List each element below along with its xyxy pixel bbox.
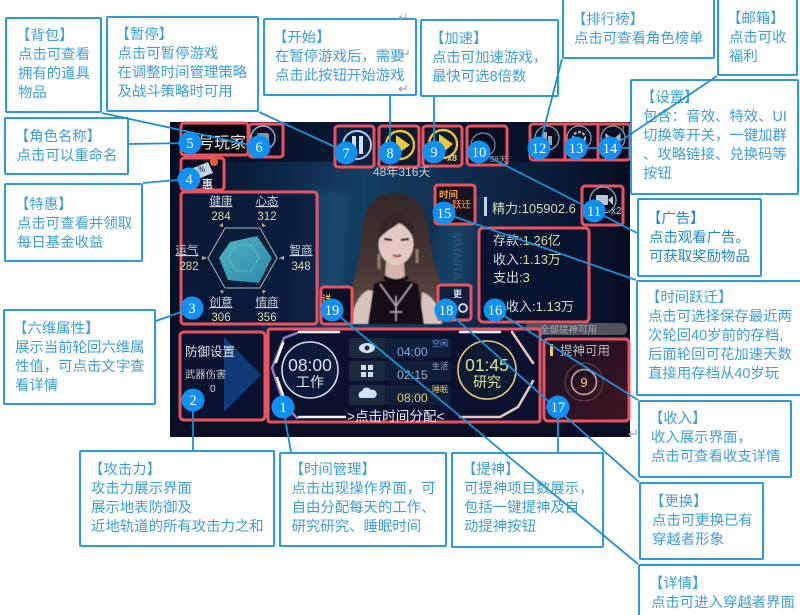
time management panel 1 bbox=[268, 329, 540, 424]
callout: 更换: 穿越者形象 bbox=[652, 532, 724, 548]
callout: 攻击力: 攻击力展示界面 bbox=[91, 480, 192, 496]
callout: 时间管理: 【时间管理】 bbox=[290, 462, 376, 478]
callout: 暂停: 【暂停】 bbox=[116, 26, 173, 42]
empty button 10 bbox=[467, 126, 507, 165]
detail button 19: 详 bbox=[322, 293, 331, 304]
time allocation rows: 生活 bbox=[432, 361, 448, 371]
number badges: 3 bbox=[188, 301, 196, 317]
character portrait: MMAIRA bbox=[450, 232, 464, 280]
number badges: 10 bbox=[472, 145, 486, 161]
speed up button 9 bbox=[423, 126, 462, 166]
callout: 提神: 包括一键提神及自 bbox=[464, 500, 579, 516]
attack power panel 2: 武器伤害 bbox=[185, 368, 226, 381]
number badges: 12 bbox=[532, 141, 546, 157]
screen background bbox=[170, 122, 630, 437]
number badges: 1 bbox=[279, 400, 287, 416]
character portrait bbox=[348, 193, 464, 324]
callout: 收入: 【收入】 bbox=[649, 410, 707, 426]
top-right button group 12 13 14: ! bbox=[622, 125, 625, 134]
callout: 开始: 在暂停游戏后，需要 bbox=[275, 48, 405, 64]
callout: 背包 bbox=[5, 17, 102, 113]
six attributes radar panel 3: 312 bbox=[257, 211, 277, 223]
time jump button 15 bbox=[435, 185, 475, 224]
callout: 更换: 【更换】 bbox=[650, 494, 708, 510]
callout: 时间跃迁: 次轮回40岁前的存档, bbox=[648, 328, 783, 344]
number badges: 9 bbox=[430, 145, 438, 161]
callout: 特惠: 【特惠】 bbox=[15, 196, 73, 212]
callout: 排行榜 bbox=[562, 0, 715, 59]
callout: 时间跃迁 bbox=[636, 280, 800, 396]
callout: 邮箱 bbox=[717, 0, 798, 76]
callout: 详情: 点击可进入穿越者界面 bbox=[651, 594, 795, 610]
number badges: 7 bbox=[342, 146, 350, 162]
income panel 16 bbox=[479, 228, 589, 322]
research time dial: 研究 bbox=[473, 374, 501, 390]
callout: 六维属性: 看详情 bbox=[15, 378, 58, 394]
callout: 设置: 包含：音效、特效、UI bbox=[643, 108, 787, 124]
income panel 16: 支出:3 bbox=[493, 270, 530, 285]
callout: 时间跃迁: 点击可选择保存最近两 bbox=[648, 308, 792, 324]
callout: 设置: 、攻略链接、兑换码等 bbox=[643, 146, 787, 162]
research time dial bbox=[458, 341, 516, 399]
callout: 时间跃迁: 后面轮回可花加速天数 bbox=[648, 346, 792, 362]
callout: 提神: 动提神按钮 bbox=[464, 518, 536, 534]
number badges: 4 bbox=[185, 172, 193, 188]
callout: 时间管理 bbox=[279, 452, 447, 547]
time allocation rows: 睡眠 bbox=[432, 385, 448, 394]
callout: 开始: 点击此按钮开始游戏 bbox=[275, 68, 405, 84]
callout: 设置: 按钮 bbox=[643, 166, 672, 182]
time jump button 15: 时间 bbox=[439, 189, 458, 201]
callout: 开始 bbox=[263, 18, 417, 96]
top-right button group 12 13 14 bbox=[530, 124, 630, 160]
discount button 4: % bbox=[198, 165, 205, 174]
callout: 广告: 点击观看广告。 bbox=[649, 230, 750, 246]
callout: 背包: 拥有的道具 bbox=[18, 66, 90, 82]
callout: 加速 bbox=[420, 19, 559, 97]
callout: 提神 bbox=[451, 452, 604, 548]
callout: 广告: 可获取奖励物品 bbox=[649, 248, 750, 264]
callout: 六维属性 bbox=[3, 309, 156, 405]
work time dial: 08:00 bbox=[288, 355, 332, 375]
time allocation rows: 空闲 bbox=[432, 338, 448, 348]
callout: 角色名称: 点击可以重命名 bbox=[17, 148, 117, 164]
work time dial bbox=[282, 342, 338, 398]
connector lines bbox=[102, 59, 717, 564]
callout: 排行榜: 【排行榜】 bbox=[572, 12, 644, 28]
number badges: 19 bbox=[325, 303, 339, 319]
callout: 特惠: 点击可查看并领取 bbox=[17, 216, 132, 232]
start button 8 bbox=[379, 126, 419, 167]
callout: 广告: 【广告】 bbox=[647, 210, 705, 226]
pause button 7 bbox=[335, 126, 374, 167]
energy text: 精力:105902.6 bbox=[492, 201, 576, 216]
six attributes radar panel 3: 282 bbox=[179, 261, 199, 273]
research time dial: 01:45 bbox=[465, 355, 509, 375]
number badges: 16 bbox=[488, 303, 502, 319]
callout: 更换 bbox=[639, 482, 764, 560]
number badges: 15 bbox=[437, 206, 451, 222]
callout: 暂停: 点击可暂停游戏 bbox=[118, 46, 218, 62]
time jump button 15: 跃迁 bbox=[452, 199, 472, 211]
callout: 角色名称: 【角色名称】 bbox=[15, 128, 101, 144]
callout: 时间跃迁: 直接用存档从40岁玩 bbox=[648, 366, 779, 382]
change character button 18 bbox=[438, 285, 471, 320]
callout: 背包: 物品 bbox=[18, 84, 47, 100]
six attributes radar panel 3: 智商 bbox=[290, 243, 312, 257]
income panel 16: 存款:1.26亿 bbox=[493, 233, 561, 248]
callout: 提神: 【提神】 bbox=[462, 462, 520, 478]
time allocation rows bbox=[349, 338, 451, 405]
callout: 时间跃迁: 【时间跃迁】 bbox=[646, 290, 732, 306]
callout: 背包: 点击可查看 bbox=[18, 46, 90, 62]
change character button 18: 更 bbox=[453, 289, 462, 299]
callout: 暂停: 及战斗策略时可用 bbox=[118, 84, 233, 100]
return mark top: ↵ bbox=[398, 10, 409, 25]
income panel 16: 收入:1.13万 bbox=[506, 299, 574, 314]
callout: 暂停: 在调整时间管理策略 bbox=[118, 64, 247, 80]
left hexagon frame bbox=[272, 332, 345, 418]
detail button 19 bbox=[321, 287, 352, 324]
callout: 加速: 最快可选8倍数 bbox=[432, 68, 526, 84]
callout: 六维属性: 性值，可点击文字查 bbox=[15, 358, 145, 374]
name panel 5: 号玩家 bbox=[198, 134, 246, 152]
callout: 攻击力: 展示地表防御及 bbox=[91, 500, 192, 516]
callout: 攻击力: 【攻击力】 bbox=[89, 462, 161, 478]
income panel 16: 收入:1.13万 bbox=[493, 252, 561, 267]
callout: 加速: 点击可加速游戏， bbox=[432, 50, 547, 66]
refresh panel 17: 提神可用 bbox=[560, 343, 610, 358]
callout: 提神: 可提神项目数展示， bbox=[464, 480, 594, 496]
callout: 设置 bbox=[630, 79, 799, 195]
refresh panel 17 bbox=[544, 339, 629, 421]
date text: 48年316天 bbox=[373, 165, 430, 179]
callout: 特惠 bbox=[4, 183, 143, 262]
callout: 时间管理: 点击出现操作界面，可 bbox=[292, 480, 436, 496]
number badges: 6 bbox=[255, 140, 263, 156]
callout: 角色名称 bbox=[4, 117, 129, 175]
number badges: 18 bbox=[439, 303, 453, 319]
callout: 邮箱: 福利 bbox=[729, 48, 758, 64]
number badges: 13 bbox=[569, 141, 583, 157]
callout: 设置: 切换等开关，一键加群 bbox=[643, 128, 787, 144]
six attributes radar panel 3: 运气 bbox=[176, 243, 199, 257]
callout: 广告 bbox=[637, 198, 762, 277]
number badges: 5 bbox=[186, 136, 194, 152]
callout: 暂停 bbox=[106, 16, 259, 112]
six attributes radar panel 3 bbox=[176, 192, 317, 324]
discount button 4 bbox=[181, 158, 224, 191]
six attributes radar panel 3: 情商 bbox=[256, 295, 278, 309]
six attributes radar panel 3: 创意 bbox=[210, 295, 232, 309]
callout: 攻击力: 近地轨道的所有攻击力之和 bbox=[91, 518, 264, 534]
callout: 背包: 【背包】 bbox=[16, 28, 74, 44]
callout: 六维属性: 【六维属性】 bbox=[13, 320, 99, 336]
six attributes radar panel 3: 306 bbox=[211, 312, 231, 324]
attack power panel 2 bbox=[180, 332, 265, 420]
number badges: 8 bbox=[386, 146, 394, 162]
six attributes radar panel 3: 284 bbox=[211, 211, 231, 223]
callout: 开始: 【开始】 bbox=[273, 30, 331, 46]
time allocation hint: >点击时间分配< bbox=[347, 409, 445, 424]
time allocation rows: 04:00 bbox=[397, 345, 428, 359]
callout: 更换: 点击可更换已有 bbox=[652, 512, 753, 528]
name panel 5 bbox=[181, 123, 248, 155]
number badges: 17 bbox=[551, 400, 565, 416]
ad button 11: x2 bbox=[611, 206, 622, 217]
refresh panel 17: 9 bbox=[580, 375, 588, 390]
time allocation rows: 08:00 bbox=[397, 391, 428, 405]
callout: 排行榜: 点击可查看角色榜单 bbox=[574, 30, 704, 46]
attack power panel 2: 0 bbox=[210, 384, 216, 395]
callout: 收入 bbox=[638, 400, 792, 478]
return mark lower: ↵ bbox=[398, 81, 409, 96]
callout: 加速: 【加速】 bbox=[430, 30, 488, 46]
right hexagon frame bbox=[460, 332, 533, 417]
attack power panel 2: 防御设置 bbox=[185, 344, 235, 359]
number badges: 14 bbox=[603, 141, 618, 157]
six attributes radar panel 3: 348 bbox=[291, 261, 311, 273]
number badges bbox=[178, 132, 622, 418]
callout: 时间管理: 自由分配每天的工作、 bbox=[292, 500, 436, 516]
callout: 邮箱: 【邮箱】 bbox=[727, 10, 785, 26]
time allocation rows: 02:15 bbox=[397, 368, 428, 382]
six attributes radar panel 3: 健康 bbox=[210, 194, 233, 208]
callout: 设置: 【设置】 bbox=[641, 90, 699, 106]
work time dial: 工作 bbox=[296, 374, 324, 390]
callout: 特惠: 每日基金收益 bbox=[17, 234, 103, 250]
empty button 10: 38天 bbox=[490, 155, 507, 164]
callout: 六维属性: 展示当前轮回六维属 bbox=[15, 340, 145, 356]
return mark screen corner: ↵ bbox=[628, 426, 639, 441]
number badges: 2 bbox=[189, 393, 197, 409]
return mark middle: ↵ bbox=[400, 46, 411, 61]
callout: 收入: 收入展示界面， bbox=[651, 430, 752, 446]
six attributes radar panel 3: 356 bbox=[257, 312, 277, 324]
callout: 攻击力 bbox=[79, 450, 275, 547]
bag button 6 bbox=[249, 124, 283, 157]
all refresh status pill: 全部提神可用 bbox=[540, 324, 597, 336]
number badges: 11 bbox=[587, 204, 601, 220]
six attributes radar panel 3: 心态 bbox=[256, 195, 279, 208]
callout: 时间管理: 研究研究、睡眠时间 bbox=[292, 518, 421, 534]
callout: 收入: 点击可查看收支详情 bbox=[651, 448, 781, 464]
discount button 4: 惠 bbox=[202, 177, 213, 191]
callout: 详情: 【详情】 bbox=[649, 576, 707, 592]
callout: 邮箱: 点击可收 bbox=[729, 30, 787, 46]
callout: 详情 bbox=[638, 564, 800, 615]
speed up button 9: x8 bbox=[447, 153, 457, 163]
ad button 11 bbox=[582, 186, 623, 225]
all refresh status pill bbox=[525, 323, 627, 336]
